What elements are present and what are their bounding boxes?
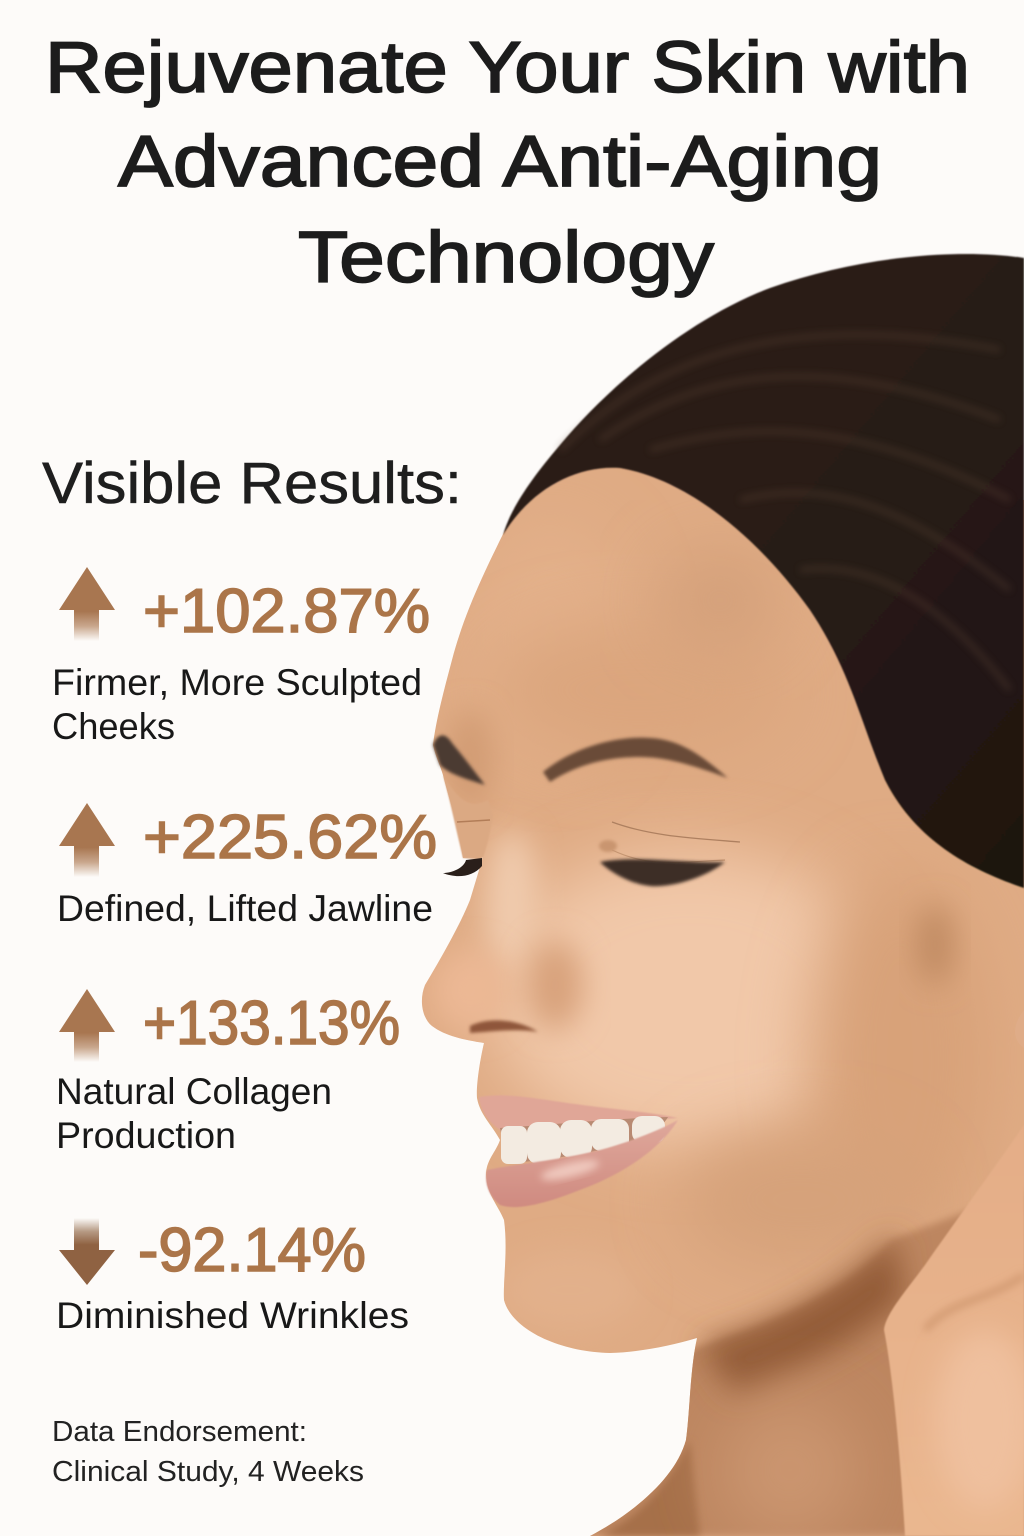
ear edge bbox=[1015, 1010, 1024, 1048]
data endorsement note: Clinical Study, 4 Weeks bbox=[52, 1456, 364, 1488]
result: lifted jawline bbox=[57, 803, 437, 929]
jaw shadow and neck bbox=[590, 1210, 962, 1536]
lips and teeth bbox=[479, 1095, 678, 1207]
icon: up arrow bbox=[59, 803, 115, 877]
title: Technology bbox=[298, 218, 714, 298]
label: Natural Collagen bbox=[56, 1071, 332, 1112]
label bbox=[52, 662, 422, 747]
label: Cheeks bbox=[52, 706, 175, 747]
label: Defined, Lifted Jawline bbox=[57, 888, 433, 929]
hair bbox=[503, 254, 1024, 888]
near eyebrow bbox=[543, 738, 728, 782]
value: +102.87% bbox=[143, 577, 430, 646]
face and neck skin bbox=[422, 466, 1024, 1536]
label: Diminished Wrinkles bbox=[56, 1295, 409, 1336]
near eye closed bbox=[599, 822, 740, 886]
result: diminished wrinkles bbox=[56, 1216, 409, 1336]
title bbox=[45, 28, 970, 298]
title: Advanced Anti-Aging bbox=[118, 122, 882, 202]
label: Production bbox=[56, 1115, 236, 1156]
value: +133.13% bbox=[143, 989, 400, 1058]
portrait photo of woman in profile bbox=[400, 250, 1024, 1536]
data endorsement note bbox=[52, 1416, 364, 1488]
label bbox=[56, 1071, 332, 1156]
title: Rejuvenate Your Skin with bbox=[45, 28, 970, 108]
far eyebrow bbox=[433, 735, 485, 785]
icon: up arrow bbox=[59, 567, 115, 641]
data endorsement note: Data Endorsement: bbox=[52, 1416, 307, 1448]
heading: visible results: Visible Results: bbox=[42, 451, 462, 516]
result: firmer cheeks bbox=[52, 567, 430, 747]
far eye socket and lashes bbox=[443, 775, 493, 876]
icon: up arrow bbox=[59, 989, 115, 1062]
value: +225.62% bbox=[143, 803, 437, 872]
label: Firmer, More Sculpted bbox=[52, 662, 422, 703]
nostril bbox=[470, 1020, 538, 1033]
hand bbox=[884, 1125, 1024, 1536]
value: -92.14% bbox=[138, 1216, 366, 1285]
result: collagen production bbox=[56, 989, 400, 1156]
icon: down arrow bbox=[59, 1218, 115, 1285]
